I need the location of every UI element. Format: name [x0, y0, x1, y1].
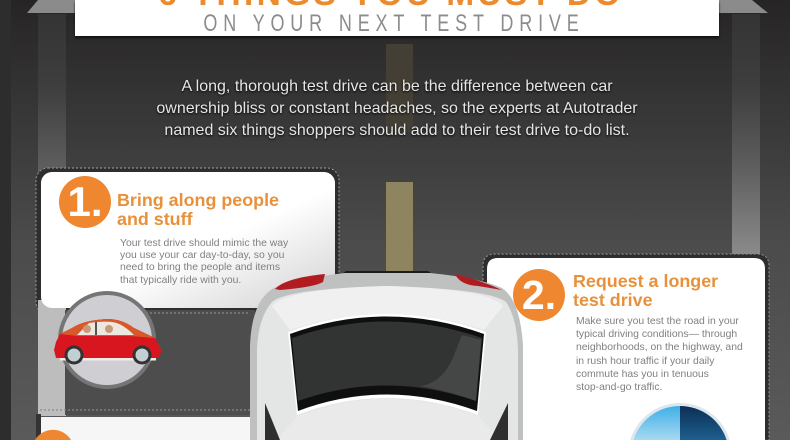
step 1 number badge: 1.: [67, 178, 103, 225]
step 1 body: Your test drive should mimic the way: [120, 238, 288, 249]
step 2 number badge: [513, 269, 565, 321]
step 2 body: commute has you in tenuous: [576, 369, 709, 380]
intro text: named six things shoppers should add to their test drive to-do list.: [164, 122, 630, 139]
step 2 body: typical driving conditions— through: [576, 329, 737, 340]
step 1 body: need to bring the people and items: [120, 262, 280, 273]
intro text: ownership bliss or constant headaches, so the experts at Autotrader: [156, 100, 638, 117]
tail light right: [455, 274, 502, 290]
rear window: [288, 314, 486, 415]
step 2 body: [576, 316, 743, 393]
header ribbon folds: [27, 0, 768, 13]
step 2 number badge: 2.: [522, 272, 556, 318]
step 1 body: that typically ride with you.: [120, 275, 241, 286]
intro text: [156, 78, 638, 140]
step 1 heading: [117, 190, 279, 229]
intro text: A long, thorough test drive can be the difference between car: [181, 78, 613, 95]
step 1 heading: Bring along people: [117, 190, 279, 210]
tail light left: [275, 274, 325, 290]
step 2 body: stop-and-go traffic.: [576, 382, 662, 393]
panel: step 2: [513, 269, 743, 393]
header banner: [75, 0, 719, 36]
step 2 heading: Request a longer: [573, 271, 718, 291]
step 1 heading: and stuff: [117, 209, 193, 229]
step 2 body: Make sure you test the road in your: [576, 316, 739, 327]
step 1 body: you use your car day-to-day, so you: [120, 250, 284, 261]
step 2 body: neighborhoods, on the highway, and: [576, 342, 743, 353]
side window right: [490, 403, 508, 440]
side window left: [265, 403, 280, 440]
step 2 heading: test drive: [573, 290, 653, 310]
step 2 body: in rush hour traffic if your daily: [576, 356, 714, 367]
step 1 number badge: [59, 176, 111, 228]
panel: step 1: [59, 176, 288, 286]
step 2 heading: [573, 271, 718, 310]
step 1 body: [120, 238, 288, 286]
